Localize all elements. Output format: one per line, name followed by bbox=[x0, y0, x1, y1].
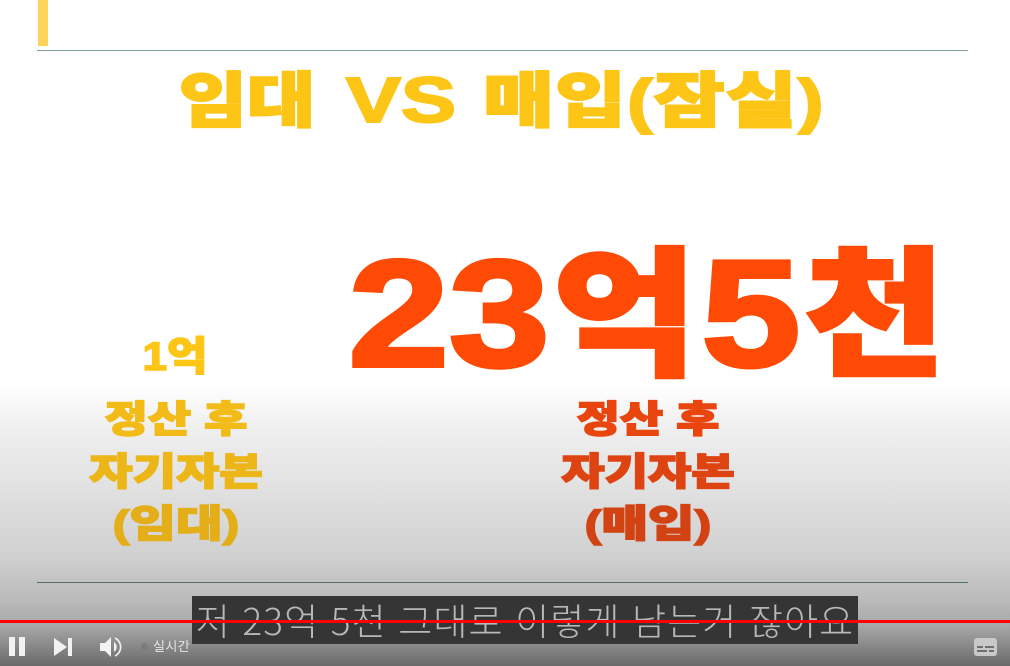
accent bar bbox=[38, 0, 48, 46]
icon: captions bbox=[974, 638, 997, 656]
label line 3: (임대) bbox=[113, 504, 239, 546]
label line 3: (매입) bbox=[585, 504, 711, 546]
icon: pause bbox=[9, 637, 25, 656]
title bbox=[179, 64, 825, 136]
label: lease equity bbox=[88, 399, 263, 546]
digit 5: 5 bbox=[702, 229, 800, 399]
title word: lease: 임대 bbox=[179, 68, 315, 135]
bottom rule bbox=[37, 582, 968, 583]
label line 1: 정산 후 bbox=[577, 399, 719, 440]
icon: volume bbox=[100, 637, 122, 657]
title word: VS: VS bbox=[346, 64, 456, 136]
digits 23: 23 bbox=[348, 229, 550, 399]
label line 2: 자기자본 bbox=[89, 452, 263, 494]
progress bar bbox=[0, 620, 1010, 623]
big number: purchase bbox=[348, 229, 945, 399]
icon: next bbox=[54, 638, 72, 656]
label: purchase equity bbox=[560, 399, 735, 546]
unit cheon: 천 bbox=[805, 239, 945, 394]
small number: lease: 1억 bbox=[143, 335, 207, 379]
live label: 실시간 bbox=[153, 639, 190, 654]
top rule bbox=[37, 50, 968, 51]
live indicator bbox=[141, 639, 190, 654]
title word: purchase (Jamsil): 매입(잠실) bbox=[483, 68, 825, 135]
label line 2: 자기자본 bbox=[561, 452, 735, 494]
live dot bbox=[141, 643, 148, 650]
label line 1: 정산 후 bbox=[105, 399, 247, 440]
unit eok: 억 bbox=[553, 239, 697, 394]
